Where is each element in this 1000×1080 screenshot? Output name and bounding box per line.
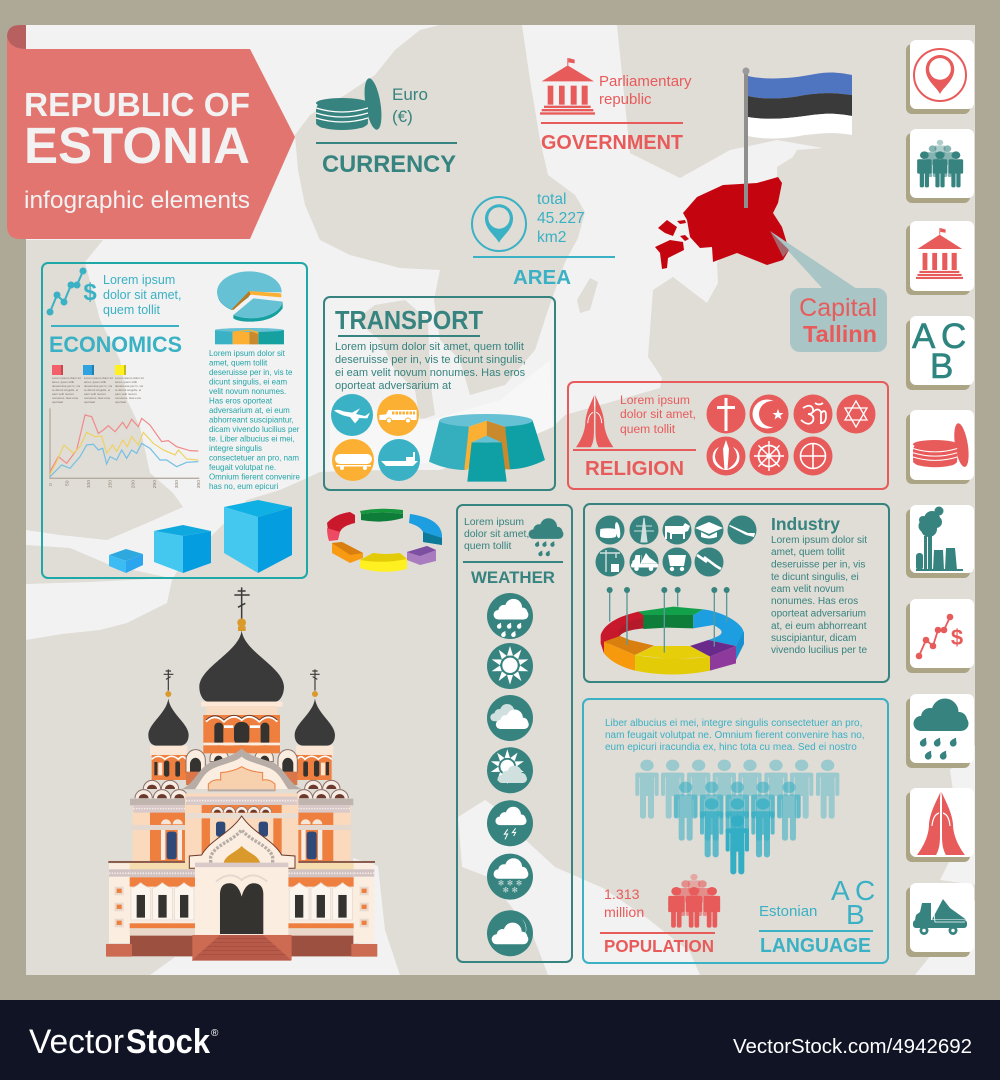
chart legend: Lorem ipsum dolor sit bbox=[115, 376, 144, 380]
sidebar: economics tile: $ bbox=[951, 625, 963, 650]
panel: industry bbox=[584, 504, 889, 682]
footer bar: Stock bbox=[126, 1023, 210, 1061]
line chart: 250 bbox=[152, 480, 158, 488]
sidebar: weather tile bbox=[906, 694, 974, 768]
body text: adversarium at, ei eum bbox=[209, 406, 290, 415]
footer bar: ® bbox=[211, 1028, 219, 1039]
body text: integre singulis bbox=[209, 444, 262, 453]
body text: amet, quem tollit bbox=[209, 358, 268, 368]
icon: star of David bbox=[836, 394, 876, 434]
entrance portal bbox=[189, 816, 295, 936]
icon: rifle bbox=[728, 516, 756, 544]
religion text bbox=[620, 393, 696, 436]
title banner: ESTONIA bbox=[24, 117, 250, 174]
weather intro text: Lorem ipsum bbox=[464, 517, 524, 528]
line chart: 150 bbox=[108, 480, 114, 488]
icon: rail tanker bbox=[332, 439, 374, 481]
line chart: 200 bbox=[130, 480, 136, 488]
chart: 3D segmented ring bbox=[327, 509, 442, 572]
chart legend: te dicunt singulis, ei bbox=[115, 388, 142, 392]
chart legend: Lorem ipsum dolor sit bbox=[84, 376, 113, 380]
government block: GOVERNMENT bbox=[541, 131, 683, 154]
icon: mortarboard bbox=[694, 516, 724, 544]
weather intro text: dolor sit amet, bbox=[464, 529, 529, 540]
body text: Lorem ipsum dolor sit bbox=[209, 349, 286, 358]
icon: overcast bbox=[487, 695, 533, 741]
chart legend: deseruisse per in, vis bbox=[115, 384, 144, 388]
panel: population and language bbox=[583, 699, 888, 963]
panel: weather bbox=[457, 505, 572, 962]
panel: population and language: LANGUAGE bbox=[760, 934, 871, 957]
transport text bbox=[335, 341, 526, 392]
panel: transport: TRANSPORT bbox=[335, 307, 483, 335]
icon: khanda bbox=[706, 436, 746, 476]
sidebar: people tile bbox=[906, 129, 974, 203]
transport text: oporteat adversarium at bbox=[335, 380, 451, 392]
sidebar: government tile bbox=[906, 221, 974, 295]
currency block: Euro bbox=[392, 85, 428, 104]
title banner bbox=[7, 25, 295, 239]
chart legend: deseruisse per in, vis bbox=[52, 384, 81, 388]
panel: population and language: POPULATION bbox=[604, 936, 714, 956]
icon: cargo ship bbox=[378, 439, 420, 481]
central gable bbox=[182, 748, 302, 791]
panel: religion bbox=[568, 382, 888, 489]
body text: consectetuer an pro, nam bbox=[209, 454, 299, 462]
illustration: Alexander Nevsky Cathedral bbox=[106, 587, 377, 961]
map of Estonia bbox=[655, 177, 789, 269]
central upper body bbox=[185, 793, 298, 863]
3D cone chart bbox=[429, 414, 545, 482]
population text: Liber albucius ei mei, integre singulis consectetuer an pro, bbox=[605, 718, 862, 729]
icon: rain cloud bbox=[529, 518, 563, 556]
icon: ABC letters: A bbox=[831, 875, 850, 906]
icon: construction crane bbox=[596, 548, 624, 576]
weather intro text bbox=[464, 517, 529, 552]
intro text: quem tollit bbox=[103, 303, 160, 317]
chart legend: oporteat bbox=[115, 400, 126, 404]
icon: coin stack bbox=[596, 516, 624, 544]
chart legend: deseruisse per in, vis bbox=[84, 384, 113, 388]
icon: power pylon bbox=[630, 516, 658, 544]
government block bbox=[540, 58, 692, 154]
line chart bbox=[48, 408, 202, 488]
population figure: million bbox=[604, 905, 644, 921]
sidebar: economics tile bbox=[906, 599, 974, 673]
Estonian flag bbox=[742, 68, 852, 208]
main dome and cross bbox=[199, 587, 284, 702]
industry text: at, ei eum abhorreant bbox=[771, 621, 867, 632]
cathedral left half bbox=[106, 669, 228, 957]
area block: 45.227 bbox=[537, 210, 585, 227]
chart: ring with pins bbox=[601, 587, 744, 674]
sidebar: language tile bbox=[906, 316, 974, 390]
panel: religion: RELIGION bbox=[585, 458, 684, 480]
body text: dicam vivendo lucilius per bbox=[209, 425, 300, 434]
intro text: dolor sit amet, bbox=[103, 288, 182, 302]
religion text: dolor sit amet, bbox=[620, 407, 696, 421]
industry text: vivendo lucilius per te bbox=[771, 645, 867, 656]
icon: mine cart bbox=[662, 548, 692, 576]
icon: solar cross bbox=[794, 436, 832, 476]
icon: snow: ✻ bbox=[507, 879, 513, 888]
icon: bus bbox=[377, 394, 419, 436]
language figure: Estonian bbox=[759, 903, 817, 920]
industry text: nonumes. Has eros bbox=[771, 596, 858, 607]
footer bar: VectorStock.com/4942692 bbox=[733, 1036, 972, 1058]
chart legend: amet, quem tollit bbox=[52, 380, 74, 384]
3D cubes bbox=[109, 500, 292, 573]
line chart: 350 bbox=[196, 480, 202, 488]
weather icons column bbox=[487, 593, 533, 956]
area block bbox=[472, 191, 615, 289]
icon: growth chart with dollar bbox=[46, 268, 97, 316]
intro text: Lorem ipsum bbox=[103, 273, 175, 287]
sidebar: language tile: B bbox=[930, 347, 953, 386]
body text: Omnium fierent convenire bbox=[209, 472, 300, 482]
chart legend: oporteat bbox=[52, 400, 63, 404]
icon: om bbox=[794, 394, 832, 434]
government block: Parliamentary bbox=[599, 73, 692, 90]
transport text: deseruisse per in, vis te dicunt singulis, bbox=[335, 354, 526, 366]
population text: nam feugait volutpat ne. Omnium fierent convenire has no, bbox=[605, 730, 865, 741]
industry text: Lorem ipsum dolor sit bbox=[771, 535, 867, 546]
icon: crescent and star bbox=[750, 394, 788, 434]
government block: republic bbox=[599, 91, 652, 108]
industry text: te dicunt singulis, ei bbox=[771, 572, 859, 583]
body text: dicunt singulis, ei eam bbox=[209, 378, 287, 386]
icon: snow: ✻ bbox=[516, 879, 522, 888]
population figure: 1.313 bbox=[604, 887, 640, 903]
currency block: CURRENCY bbox=[322, 151, 456, 178]
footer logo: Vector bbox=[29, 1023, 124, 1061]
population text: eum epicuri iracundia ex, hinc tota cu mea. Sed ei nostro bbox=[605, 742, 857, 753]
industry text bbox=[771, 535, 867, 656]
intro text bbox=[103, 273, 182, 317]
chart legend: eam velit novum bbox=[84, 392, 106, 396]
icon: location pin bbox=[472, 197, 526, 251]
chart legend: eam velit novum bbox=[52, 392, 74, 396]
chart legend: te dicunt singulis, ei bbox=[84, 388, 111, 392]
line chart: 300 bbox=[174, 480, 180, 488]
icon: growth chart with dollar: $ bbox=[83, 279, 97, 306]
icon: ABC letters: C bbox=[855, 875, 875, 906]
icon: ABC letters: B bbox=[846, 899, 865, 930]
pie chart: exploded bbox=[217, 271, 283, 322]
icon: rain bbox=[487, 593, 533, 639]
icon: dharma wheel bbox=[750, 436, 788, 476]
population figure bbox=[604, 887, 644, 921]
chart legend: nonumes. Has eros bbox=[84, 396, 111, 400]
icon: thunderstorm bbox=[487, 800, 533, 846]
body text: abhorreant suscipiantur, bbox=[209, 416, 294, 424]
icon: sun with cloud bbox=[487, 747, 533, 793]
icon: snow: ✻ bbox=[498, 879, 504, 888]
capital callout: Capital bbox=[799, 294, 877, 322]
sidebar: currency tile bbox=[906, 410, 974, 484]
icon: cow bbox=[662, 516, 692, 544]
icon: parliament bbox=[540, 58, 595, 115]
footer bar bbox=[0, 1000, 1000, 1080]
panel: transport bbox=[324, 297, 555, 490]
currency block: (€) bbox=[392, 107, 413, 126]
icon: snow: ✻ bbox=[512, 886, 518, 895]
chart legend: eam velit novum bbox=[115, 392, 137, 396]
icon: sun bbox=[487, 643, 533, 689]
chart legend: oporteat bbox=[84, 400, 95, 404]
area block: km2 bbox=[537, 229, 566, 246]
icon: syringe bbox=[694, 548, 724, 576]
line chart: 100 bbox=[86, 480, 92, 488]
chart legend: amet, quem tollit bbox=[84, 380, 106, 384]
area block: total bbox=[537, 191, 566, 208]
panel: weather: WEATHER bbox=[471, 568, 555, 587]
currency block bbox=[316, 77, 457, 178]
icon: dump truck bbox=[630, 548, 658, 576]
icon: snow: ✻ bbox=[503, 886, 509, 895]
population text bbox=[605, 718, 865, 753]
transport text: ei eam velit novum nonumes. Has eros bbox=[335, 367, 526, 379]
title text: REPUBLIC OF bbox=[24, 86, 250, 123]
people pyramid bbox=[635, 760, 839, 874]
industry text: eam velit novum bbox=[771, 584, 844, 595]
capital callout bbox=[770, 231, 887, 352]
sidebar: industry tile bbox=[906, 505, 974, 578]
chart legend: Lorem ipsum dolor sit bbox=[52, 376, 81, 380]
icon: airplane bbox=[331, 394, 373, 436]
pie chart: side view bbox=[215, 328, 284, 344]
chart legend: nonumes. Has eros bbox=[52, 396, 79, 400]
sidebar: location tile bbox=[906, 40, 974, 114]
body text: velit novum nonumes. bbox=[209, 387, 286, 396]
sidebar: transport tile bbox=[906, 883, 974, 957]
icon: cross bbox=[706, 394, 746, 434]
line chart: 50 bbox=[64, 480, 70, 486]
body text: deseruisse per in, vis te bbox=[209, 368, 293, 377]
body text: te. Liber albucius ei mei, bbox=[209, 434, 295, 444]
body text: Has eros oporteat bbox=[209, 396, 273, 406]
capital callout: Tallinn bbox=[803, 321, 877, 347]
icon: snow bbox=[487, 854, 533, 900]
line chart: 0 bbox=[48, 483, 54, 486]
body text: has no, eum epicuri bbox=[209, 482, 279, 491]
icon: cloud and moon bbox=[487, 910, 533, 956]
weather intro text: quem tollit bbox=[464, 541, 511, 552]
sidebar: religion tile bbox=[906, 788, 974, 862]
cathedral right half bbox=[255, 669, 377, 957]
religion text: Lorem ipsum bbox=[620, 393, 690, 407]
transport text: Lorem ipsum dolor sit amet, quem tollit bbox=[335, 341, 524, 353]
sidebar: language tile: A bbox=[912, 317, 936, 356]
panel: economics bbox=[42, 263, 307, 578]
chart legend: nonumes. Has eros bbox=[115, 396, 142, 400]
industry text: suscipiantur, dicam bbox=[771, 633, 856, 644]
icon: ABC letters bbox=[831, 875, 875, 930]
religion text: quem tollit bbox=[620, 422, 676, 436]
title banner: infographic elements bbox=[24, 187, 250, 214]
panel: industry: Industry bbox=[771, 514, 840, 534]
body text: feugait volutpat ne. bbox=[209, 463, 276, 472]
body text bbox=[209, 349, 300, 491]
industry text: deseruisse per in, vis bbox=[771, 560, 865, 570]
central drum bbox=[201, 702, 283, 753]
sidebar: language tile: C bbox=[941, 317, 966, 356]
industry text: oporteat adversarium bbox=[771, 608, 866, 620]
icon: crowd bbox=[668, 874, 720, 928]
chart legend: amet, quem tollit bbox=[115, 380, 137, 384]
panel: economics: ECONOMICS bbox=[49, 332, 182, 357]
icon: coins bbox=[316, 77, 384, 131]
industry text: amet, quem tollit bbox=[771, 547, 845, 558]
chart legend: te dicunt singulis, ei bbox=[52, 388, 79, 392]
icon: praying hands bbox=[576, 395, 613, 447]
entrance stairs bbox=[192, 935, 292, 961]
chart legend bbox=[52, 365, 144, 404]
area block: AREA bbox=[513, 266, 571, 289]
